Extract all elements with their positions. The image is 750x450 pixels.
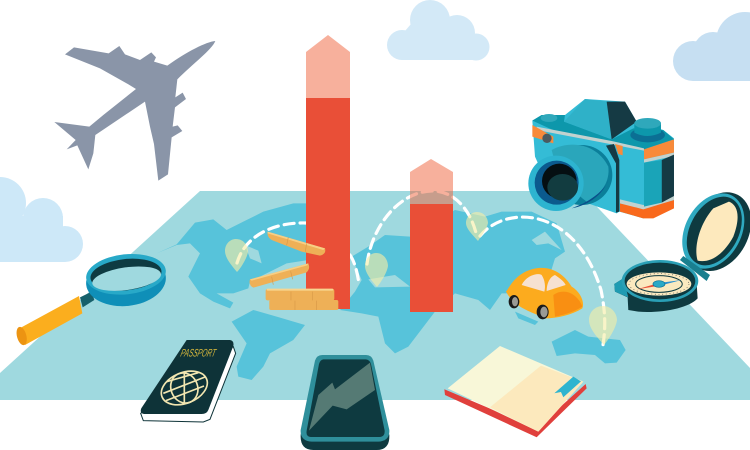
- compass lid: [670, 181, 750, 283]
- map sheet: [0, 191, 750, 400]
- coins: [250, 232, 338, 310]
- notebook: [444, 346, 587, 437]
- toy car: [506, 268, 583, 319]
- smartphone: [301, 355, 389, 450]
- lens barrel: [528, 145, 612, 211]
- passport title: PASSPORT: [179, 348, 218, 360]
- lens: [84, 250, 168, 310]
- globe emblem: [156, 365, 212, 411]
- compass base: [614, 260, 698, 312]
- continents: Eurasia, Africa, Australia: [340, 210, 626, 363]
- windows: [522, 274, 566, 292]
- cloud: top right: [673, 12, 750, 81]
- handle: [15, 292, 94, 346]
- passport: [141, 340, 236, 422]
- magnifying glass: [15, 250, 168, 346]
- bar chart: [306, 35, 453, 312]
- hinge: [680, 256, 710, 281]
- airplane: [54, 41, 215, 181]
- cloud: left: [0, 177, 83, 262]
- route lines dashed: [237, 191, 605, 345]
- continents: Americas: [157, 203, 308, 380]
- world map: [0, 191, 750, 400]
- compass dial: [627, 272, 691, 296]
- strip: [606, 144, 619, 213]
- location pins: [225, 212, 617, 345]
- camera: [528, 99, 674, 218]
- bar: tall: [306, 35, 350, 309]
- compass: [614, 181, 750, 312]
- bookmark: [554, 377, 581, 397]
- screen reflection: [309, 363, 375, 431]
- dial: [541, 114, 665, 142]
- top plate: [532, 115, 674, 149]
- viewfinder: [564, 99, 637, 139]
- bar: short: [410, 159, 453, 312]
- cloud: top centre: [387, 0, 490, 60]
- wheels: [509, 295, 549, 319]
- orange trim: [532, 125, 674, 218]
